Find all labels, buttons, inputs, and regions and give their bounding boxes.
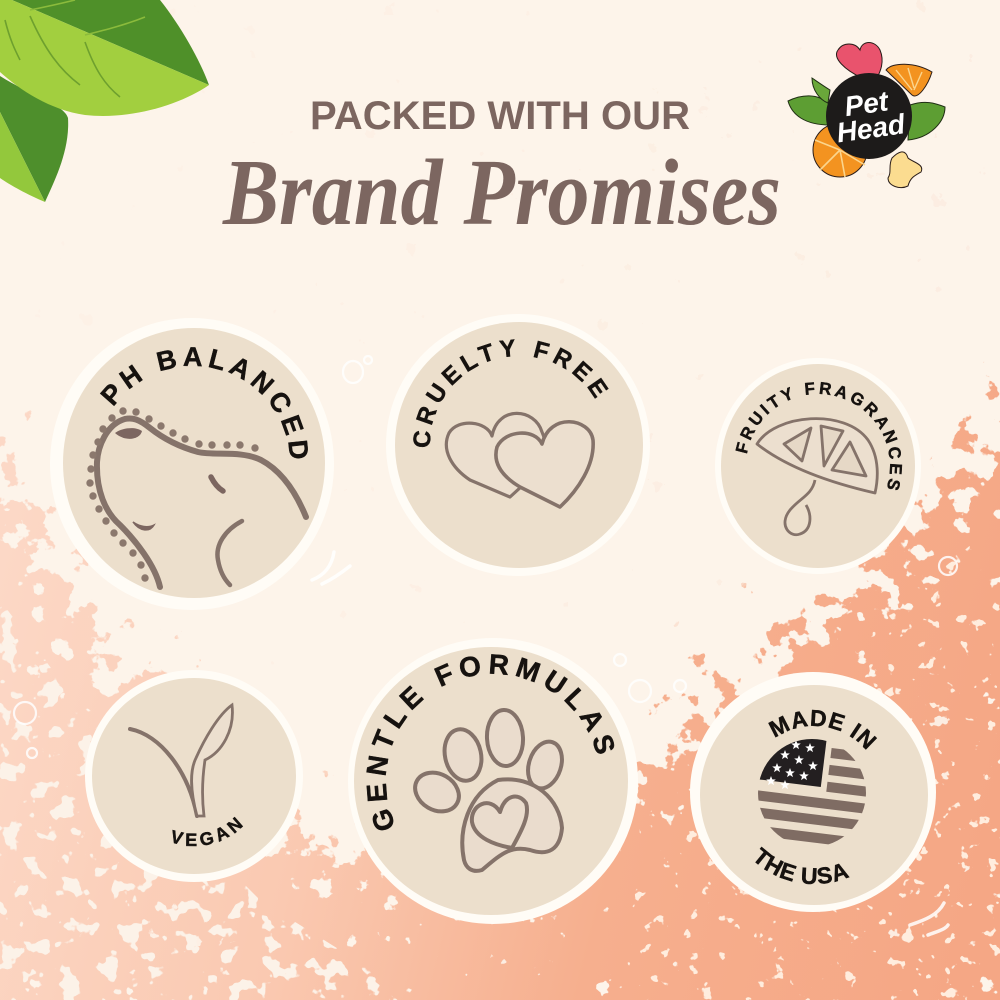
panel: fruity fragrances: [715, 358, 921, 574]
label: the usa: THE USA: [755, 846, 850, 884]
badge circle: [715, 358, 921, 574]
icon: citrus slice with drop: [757, 419, 877, 535]
panel: cruelty free: [386, 314, 650, 576]
logo orange bottom: [813, 123, 867, 177]
peach splatter background: [0, 362, 1000, 1000]
panel: ph balanced: [50, 318, 334, 610]
logo badge: [826, 73, 912, 159]
badge circle: [85, 670, 303, 882]
icon: paw with heart: [408, 709, 568, 871]
logo wordmark: Head: [835, 108, 908, 148]
panel: gentle formulas: [348, 638, 638, 924]
leaf: upper: [0, 0, 209, 116]
icon: two hearts: [446, 413, 593, 507]
heading: packed with our: PACKED WITH OUR: [310, 94, 690, 138]
label: made in: MADE IN: [768, 710, 878, 750]
badge circle: [690, 672, 936, 912]
leaves top left: [0, 0, 209, 202]
icon: dog head with dots: [86, 407, 306, 587]
badge circle: [348, 638, 638, 924]
label: cruelty free: CRUELTY FREE: [413, 339, 609, 448]
bubbles: [14, 356, 957, 758]
label: ph balanced: PH BALANCED: [100, 347, 308, 458]
panel: made in the usa: [690, 672, 936, 912]
icon: flag globe: [758, 739, 866, 844]
logo orange top: [886, 64, 932, 96]
badge circle: [50, 318, 334, 610]
logo wordmark: [831, 83, 908, 148]
label: gentle formulas: GENTLE FORMULAS: [366, 654, 614, 830]
badge circle: [386, 314, 650, 576]
panel: vegan: [85, 670, 303, 882]
heading: brand promises: Brand Promises: [222, 141, 781, 245]
logo leaves: [788, 78, 945, 140]
logo heart: [837, 42, 882, 78]
label: vegan: VEGAN: [172, 816, 244, 846]
label: fruity fragrances: FRUITY FRAGRANCES: [735, 382, 902, 490]
logo: pet head: [788, 42, 945, 188]
logo bone: [888, 152, 922, 188]
logo wordmark: Pet: [843, 85, 892, 122]
leaf: lower: [0, 76, 68, 202]
swoosh marks: [312, 552, 948, 935]
icon: sprout: [130, 705, 232, 816]
